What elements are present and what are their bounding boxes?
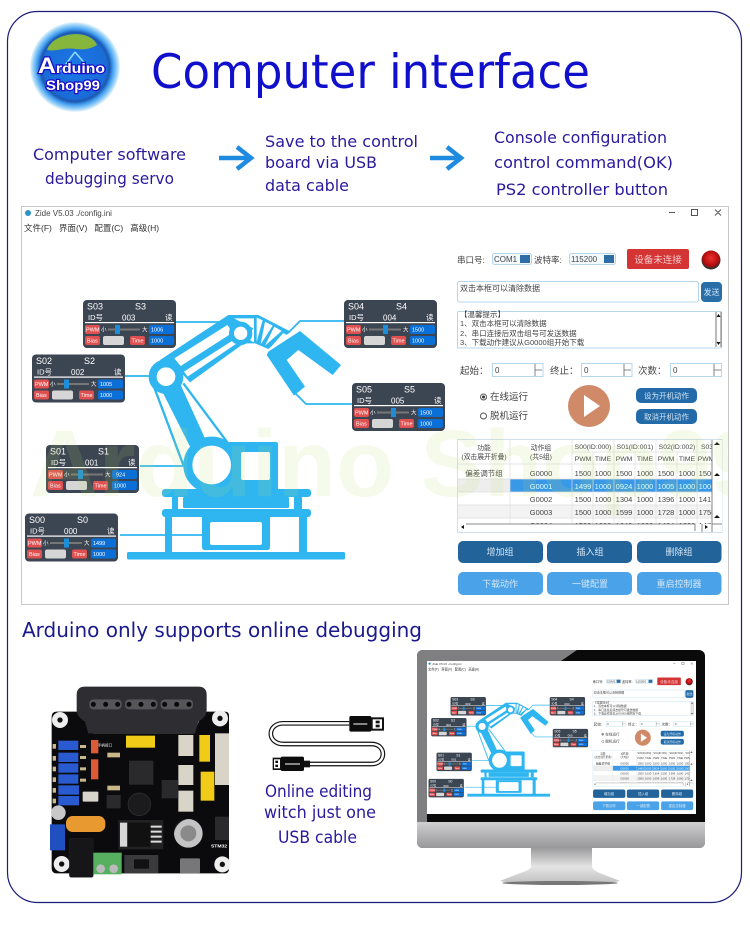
action table: TIME: [637, 456, 654, 463]
servo panel S00: ID号: [30, 526, 45, 536]
action table: G0003: [530, 508, 552, 517]
servo panel S04: Bias: [348, 338, 359, 344]
servo panel S00: Time: [74, 552, 86, 558]
servo panel S04: S4: [396, 302, 407, 312]
play button: [568, 385, 610, 427]
step 3 text: control command(OK): [494, 153, 673, 172]
action table: 1417: [699, 495, 715, 504]
servo panel S03: S03: [87, 302, 103, 312]
servo panel S04: PWM: [347, 328, 361, 334]
servo panel S02: [32, 354, 125, 402]
arrow 2: [430, 147, 461, 169]
loop inputs: 次数：: [638, 365, 667, 377]
servo panel S01: [46, 445, 139, 493]
servo panel S03: Bias: [87, 338, 98, 344]
servo panel S02: 读: [114, 366, 122, 376]
servo panel S04: 1000: [412, 338, 424, 344]
step 1 text: debugging servo: [45, 169, 174, 188]
servo panel S01: S1: [98, 446, 109, 456]
servo panel S03: S3: [135, 302, 146, 312]
action table: 1728: [658, 508, 674, 517]
servo panel S00: 大: [84, 539, 90, 547]
action table: S01(ID:001): [617, 444, 653, 451]
servo panel S01: S01: [50, 446, 66, 456]
servo panel S05: PWM: [355, 410, 369, 416]
servo panel S05: S05: [356, 384, 372, 394]
servo panel S01: 001: [85, 458, 99, 468]
servo panel S01: 大: [105, 470, 111, 478]
servo panel S02: 大: [91, 380, 97, 388]
micro USB port: [180, 858, 200, 873]
monitor stand: [500, 848, 620, 885]
send text box: [458, 282, 698, 302]
action table: 1005: [658, 482, 674, 491]
logo: Arduino Shop99: [30, 22, 120, 112]
action table: S03: [701, 444, 713, 451]
servo panel S00: [25, 514, 118, 562]
action table: 1000: [595, 469, 611, 478]
action table: [458, 440, 722, 532]
action table: 1500: [699, 469, 715, 478]
serial port controls: 波特率:: [534, 255, 562, 265]
robot arm illustration: [120, 315, 352, 560]
action table: 1396: [658, 495, 674, 504]
servo panel S05: Time: [400, 422, 413, 428]
servo panel S03: 大: [142, 326, 148, 334]
servo panel S03: 读: [165, 312, 173, 322]
servo panel S02: 002: [71, 368, 85, 377]
controller board photo: [50, 687, 230, 877]
action buttons: 重启控制器: [656, 578, 702, 589]
action table: 1000: [637, 508, 653, 517]
servo panel S02: S02: [36, 356, 52, 366]
servo panel S01: ID号: [51, 458, 66, 467]
action table: 1000: [679, 482, 695, 491]
monitor: [417, 650, 705, 885]
servo panel S05: S5: [404, 384, 415, 394]
servo panel S01: PWM: [49, 472, 63, 478]
white connectors: [178, 733, 229, 812]
yellow headers: [126, 735, 214, 801]
servo panel S01: 小: [64, 470, 70, 478]
action buttons: 一键配置: [572, 578, 608, 589]
boot action buttons: [636, 388, 697, 424]
monitor screen: [427, 661, 696, 814]
servo panel S02: 1005: [100, 382, 112, 388]
small capacitor: [51, 805, 66, 820]
servo panel S03: 003: [122, 314, 136, 322]
servo panel S04: 读: [426, 312, 434, 322]
group buttons: 增加组: [486, 546, 514, 557]
action table: 1000: [595, 482, 611, 491]
servo panel S05: ID号: [357, 396, 372, 405]
cable caption: USB cable: [278, 828, 357, 848]
lower plug: [273, 757, 310, 771]
header pins and small SMD parts: [53, 744, 120, 803]
servo panel S00: PWM: [28, 541, 42, 547]
group buttons: [458, 541, 722, 563]
cable caption: [264, 782, 376, 848]
servo panel S01: Time: [94, 484, 107, 490]
arm upper section, traced in 3x crop coordinates: [153, 315, 341, 489]
servo panel S03: 小: [101, 326, 107, 334]
cable caption: Online editing: [265, 782, 372, 802]
action table: 动作组: [531, 443, 551, 452]
action table: 1499: [575, 482, 591, 491]
servo panel S05: 小: [370, 408, 376, 416]
servo panel S00: 小: [43, 539, 49, 547]
servo panel S03: 1000: [151, 338, 163, 344]
push button: [83, 792, 98, 802]
action table: 1640: [616, 521, 632, 530]
regulator: [118, 820, 163, 849]
loop inputs: [460, 364, 722, 377]
action table: 1500: [575, 521, 591, 530]
action table: TIME: [595, 456, 612, 463]
action table: 1000: [637, 482, 653, 491]
action table: PWM: [658, 456, 675, 463]
loop inputs: 0: [495, 366, 500, 375]
action table: (共5组): [530, 452, 552, 461]
send button: 发送: [704, 287, 720, 297]
action table: 1000: [637, 495, 653, 504]
watermark: Arduino Shop99: [30, 411, 750, 517]
servo panel S02: Time: [80, 393, 93, 399]
mounting hole centers: [57, 716, 225, 867]
red headers: [91, 740, 98, 779]
tips box: 【温馨提示】: [460, 309, 505, 319]
action table: 1000: [595, 521, 611, 530]
servo panel S01: 读: [128, 457, 136, 467]
servo panel S03: PWM: [86, 328, 100, 334]
logo: Arduino Shop99: Shop99: [46, 77, 100, 93]
servo panel S05: 读: [434, 395, 442, 405]
board label: controller port: 手柄接口: [98, 743, 113, 748]
servo panel S05: 1000: [420, 422, 432, 428]
servo panel S05: Bias: [356, 422, 367, 428]
subheading: Arduino only supports online debugging: [22, 618, 422, 642]
action table: G0000: [530, 469, 552, 478]
tips box: 1、双击本框可以清除数据: [460, 318, 547, 328]
servo panel S05: 大: [411, 408, 417, 416]
menu bar: 文件(F) 界面(V) 配置(C) 高级(H): [24, 223, 159, 233]
servo panel S04: 小: [362, 326, 368, 334]
serial port controls: 串口号:: [457, 255, 485, 265]
action table: 1006: [699, 482, 715, 491]
cable loop: [271, 723, 383, 764]
MCU chips: [107, 761, 229, 840]
servo panel S02: Bias: [36, 393, 47, 399]
servo panel S02: ID号: [37, 368, 52, 376]
servo panel S04: 1500: [412, 328, 424, 334]
servo panel S04: ID号: [349, 313, 364, 322]
connector lines: [120, 321, 352, 535]
logo: Arduino Shop99: Arduino: [38, 53, 105, 78]
boot action buttons: 取消开机动作: [644, 412, 689, 422]
servo panel S03: Time: [132, 338, 144, 344]
buzzer: [128, 793, 151, 816]
send button: [701, 282, 722, 302]
servo panel S00: 读: [107, 526, 115, 536]
servo panel S02: PWM: [35, 382, 49, 388]
servo panel S04: [344, 300, 437, 348]
servo panel S02: S2: [84, 356, 95, 366]
trim potentiometer: [50, 824, 65, 850]
action table: 1304: [616, 495, 632, 504]
serial port controls: COM1: [494, 255, 518, 264]
step 2 text: data cable: [265, 176, 349, 195]
servo panel S01: 1000: [114, 484, 126, 490]
blue servo headers: [58, 741, 79, 805]
servo panel S00: 1000: [93, 552, 105, 558]
electrolytic capacitor: [174, 819, 203, 848]
action table: PWM: [698, 456, 715, 463]
run mode radios: 在线运行: [490, 391, 529, 403]
boot action buttons: 设为开机动作: [644, 390, 689, 400]
action table: PWM: [575, 456, 592, 463]
action table: S02(ID:002): [659, 444, 695, 451]
action table: 1500: [575, 495, 591, 504]
cable caption: witch just one: [264, 803, 376, 823]
step 3 text: [494, 128, 673, 199]
servo panel S02: 1000: [100, 393, 112, 399]
step 2 text: board via USB: [265, 153, 377, 172]
step 2 text: Save to the control: [265, 132, 418, 151]
servo panel S01: 924: [116, 472, 125, 478]
inductor coil: [66, 816, 105, 832]
action table: 1500: [616, 469, 632, 478]
status LED: [702, 250, 720, 270]
servo panel S05: 1500: [420, 410, 432, 416]
monitor bezel: [417, 650, 705, 848]
title: Computer interface: [151, 45, 590, 100]
USB cable: [271, 716, 384, 771]
serial port controls: [457, 254, 616, 265]
servo panel S03: [83, 300, 176, 348]
action table: 1000: [679, 495, 695, 504]
step 3 text: Console configuration: [494, 128, 667, 147]
action table: G0002: [530, 495, 552, 504]
loop inputs: 0: [673, 366, 678, 375]
serial port controls: 115200: [571, 255, 598, 264]
action table: 1599: [616, 508, 632, 517]
action table: 1500: [575, 469, 591, 478]
action table: G0001: [530, 482, 552, 491]
action buttons: 下载动作: [482, 578, 518, 589]
action table: 功能: [477, 443, 491, 452]
servo panel S03: 1006: [151, 328, 163, 334]
servo panel S01: Bias: [50, 484, 61, 490]
tips box: [458, 309, 722, 348]
servo panel S04: S04: [348, 302, 364, 312]
action table: 1000: [679, 469, 695, 478]
tips box: 3、下载动作建议从G0000组开始下载: [460, 337, 585, 347]
tips box: 2、串口连接后双击组号可发送数据: [460, 328, 577, 338]
arrow 1: [219, 147, 251, 169]
panel: app window background: [22, 206, 728, 604]
action table: 0924: [616, 482, 632, 491]
action table: 1500: [658, 469, 674, 478]
action table: 1000: [637, 521, 653, 530]
loop inputs: 终止：: [550, 365, 579, 377]
action table: 1000: [595, 508, 611, 517]
action table: 1000: [595, 495, 611, 504]
cable core: [271, 723, 383, 764]
servo panel S00: 000: [64, 527, 78, 536]
servo panel S00: 1499: [93, 541, 105, 547]
servo panel S04: Time: [392, 338, 405, 344]
window title: Zide V5.03 ./config.ini: [35, 209, 112, 218]
group buttons: 删除组: [665, 546, 693, 557]
board body: [52, 712, 229, 873]
action table: TIME: [679, 456, 696, 463]
mini software screenshot: [428, 662, 693, 810]
connect button: [627, 249, 689, 269]
action table: 1000: [679, 508, 695, 517]
PS2 connector: [77, 687, 207, 733]
servo panel S04: 大: [403, 326, 409, 334]
servo panel S05: [352, 383, 445, 431]
action table: S00(ID:000): [575, 444, 611, 451]
step 1 text: [33, 145, 186, 188]
run mode radios: 脱机运行: [490, 410, 529, 422]
action table: (双击展开折叠): [461, 452, 507, 461]
upper plug: [349, 716, 384, 732]
STM32 label: STM32: [211, 844, 227, 850]
mounting holes: [52, 710, 230, 872]
servo panel S00: S00: [29, 515, 45, 525]
servo panel S04: 004: [383, 314, 397, 322]
action table: 1000: [637, 469, 653, 478]
action buttons: [458, 572, 722, 595]
action table: PWM: [616, 456, 633, 463]
step 3 text: PS2 controller button: [496, 180, 668, 199]
step 2 text: [265, 132, 418, 195]
panel: software screenshot: [24, 209, 722, 595]
servo panel S05: 005: [391, 396, 405, 406]
group buttons: 插入组: [576, 546, 604, 557]
action table: 1000: [679, 521, 695, 530]
run mode radios: [480, 391, 529, 422]
action table: 1750: [699, 508, 715, 517]
send text box: 双击本框可以清除数据: [460, 283, 540, 293]
slide switch: [124, 855, 158, 873]
servo panel S02: 小: [50, 380, 56, 388]
action table: 1464: [658, 521, 674, 530]
terminal block: [93, 853, 122, 874]
power jack: [69, 838, 93, 877]
step 1 text: Computer software: [33, 145, 186, 164]
connect button: 设备未连接: [634, 254, 682, 266]
action table: 偏差调节组: [465, 468, 503, 478]
action table: 1470: [699, 521, 715, 530]
loop inputs: 起始：: [460, 365, 489, 377]
servo panel S03: ID号: [88, 313, 103, 322]
servo panel S00: S0: [77, 515, 88, 525]
loop inputs: 0: [584, 366, 589, 375]
servo panel S00: Bias: [29, 552, 40, 558]
action table: G0004: [530, 521, 552, 530]
action table: 1500: [575, 508, 591, 517]
monitor chin: [417, 822, 705, 848]
window controls: [669, 210, 721, 216]
